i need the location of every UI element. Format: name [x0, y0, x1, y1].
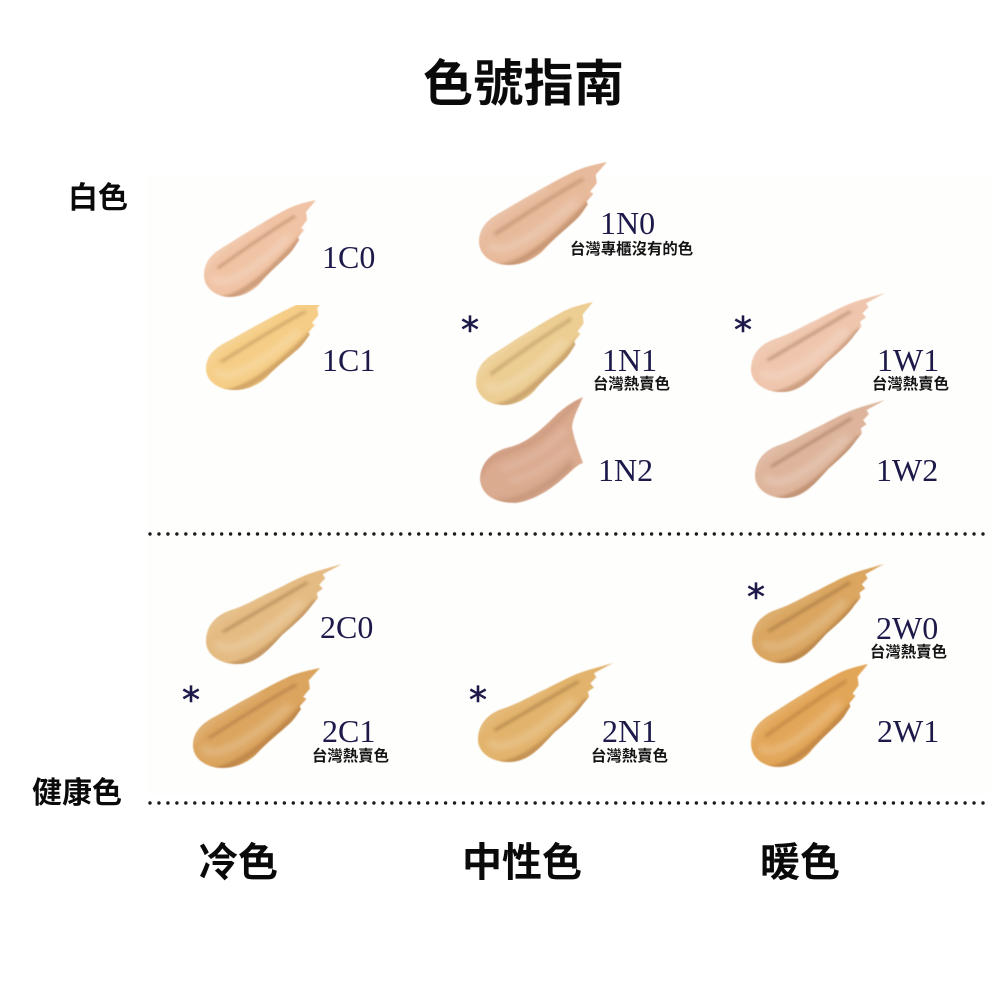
swatch: 2N1: [469, 663, 668, 765]
swatch: 1N0: [477, 162, 693, 268]
column label: 暖色: 暖色: [760, 841, 840, 885]
swatch: 2N1: 台灣熱賣色: [591, 746, 668, 765]
swatch: 2W0: 2W0: [876, 610, 938, 646]
swatch: 1N2: 1N2: [598, 452, 653, 488]
swatch: 1N2: [478, 397, 653, 503]
swatch: 1C1: 1C1: [322, 342, 375, 378]
swatch: 1W1: 台灣熱賣色: [872, 374, 949, 393]
swatch: 2W0: 台灣熱賣色: [870, 642, 947, 661]
swatch: 2C1: 台灣熱賣色: [312, 746, 389, 765]
swatch: 2W1: 2W1: [877, 713, 939, 749]
swatch: 2W0: [747, 564, 947, 666]
swatch: 1N1: 1N1: [602, 342, 657, 378]
swatch: 1W1: [734, 293, 949, 395]
swatch: 1C0: [202, 200, 375, 300]
divider: row two: [150, 801, 984, 805]
swatch: 1C1: [205, 305, 374, 391]
swatch: 1W1: 1W1: [877, 342, 939, 378]
column label: 中性色: 中性色: [462, 841, 582, 885]
swatch: 2W0: *: [747, 577, 765, 618]
swatch: 1N1: 台灣熱賣色: [593, 374, 670, 393]
swatch: 1W2: 1W2: [876, 452, 938, 488]
swatch: 1N1: [461, 302, 670, 408]
title: 色號指南: [423, 56, 624, 112]
column label: 冷色: 冷色: [198, 841, 278, 885]
swatch: 1W2: [753, 400, 938, 501]
row label: 白色: 白色: [68, 182, 128, 215]
divider: row one: [150, 532, 984, 536]
row label: 健康色: 健康色: [32, 777, 122, 810]
swatch: 1N0: 台灣專櫃沒有的色: [570, 239, 693, 258]
swatch: 2C0: [204, 564, 373, 667]
swatch: 2C0: 2C0: [320, 609, 373, 645]
swatch: 2N1: 2N1: [602, 713, 657, 749]
swatch: 1N1: *: [461, 310, 479, 351]
swatch: 2W1: [749, 664, 939, 770]
swatch: 1W1: *: [734, 310, 752, 351]
swatch: 2C1: 2C1: [322, 713, 375, 749]
swatch: 1N0: 1N0: [600, 205, 655, 241]
swatch: 1C0: 1C0: [322, 239, 375, 275]
swatch: 2N1: *: [469, 680, 487, 721]
swatch: 2C1: *: [182, 680, 200, 721]
swatch: 2C1: [182, 668, 389, 771]
